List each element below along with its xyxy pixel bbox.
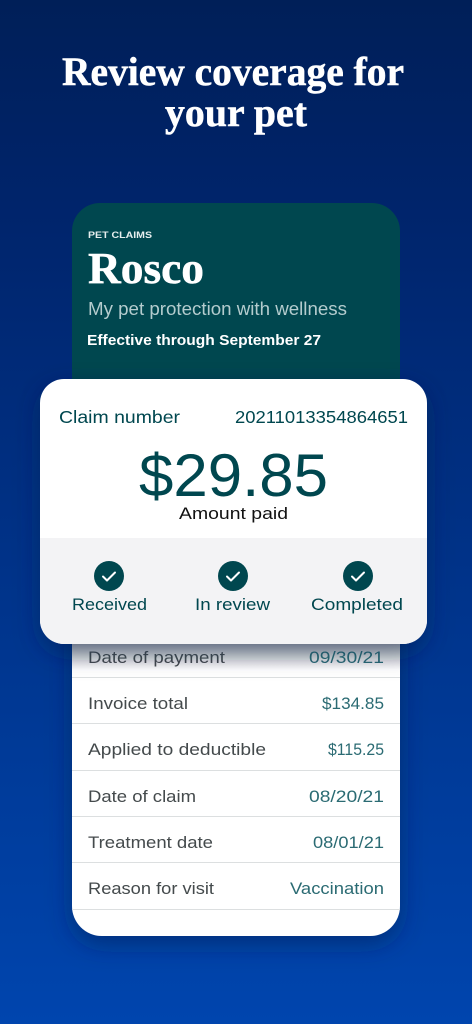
claim number: [59, 407, 408, 427]
row: invoice total: Invoice total: [88, 694, 188, 713]
row: date of payment: [72, 648, 400, 678]
row: date of claim: Date of claim: [88, 787, 196, 806]
panel: claim details: [72, 600, 400, 936]
title: your pet: [165, 90, 308, 135]
row: applied to deductible: $115.25: [328, 740, 384, 759]
title: [62, 49, 404, 135]
panel: claim summary: [40, 379, 427, 644]
claim number: Claim number: [59, 407, 180, 427]
row: treatment date: [72, 833, 400, 863]
status: in review: [195, 561, 271, 614]
status: completed: Completed: [311, 595, 403, 614]
row: reason for visit: Reason for visit: [88, 879, 214, 898]
row: applied to deductible: Applied to deductible: [88, 740, 266, 759]
row: date of payment: 09/30/21: [309, 648, 384, 667]
row: date of claim: [72, 787, 400, 817]
row: applied to deductible: [72, 740, 400, 771]
amount paid value: $29.85: [139, 442, 328, 509]
amount paid label: Amount paid: [179, 505, 288, 523]
row: treatment date: Treatment date: [88, 833, 213, 852]
row: date of payment: Date of payment: [88, 648, 225, 667]
row: invoice total: $134.85: [322, 694, 384, 713]
title: Review coverage for: [62, 49, 404, 94]
status: received: [72, 561, 147, 614]
effective date: Effective through September 27: [87, 333, 321, 349]
row: reason for visit: [72, 879, 400, 910]
plan name: My pet protection with wellness: [88, 299, 347, 319]
row: treatment date: 08/01/21: [313, 833, 384, 852]
label: pet claims: PET CLAIMS: [88, 230, 152, 241]
pet name: Rosco: [88, 244, 204, 293]
status: received: Received: [72, 595, 147, 614]
status: completed: [311, 561, 403, 614]
panel: pet header: [72, 203, 400, 400]
status: in review: In review: [195, 595, 271, 614]
row: date of claim: 08/20/21: [309, 787, 384, 806]
row: reason for visit: Vaccination: [290, 879, 384, 898]
row: invoice total: [72, 694, 400, 724]
claim number: 20211013354864651: [235, 407, 408, 427]
